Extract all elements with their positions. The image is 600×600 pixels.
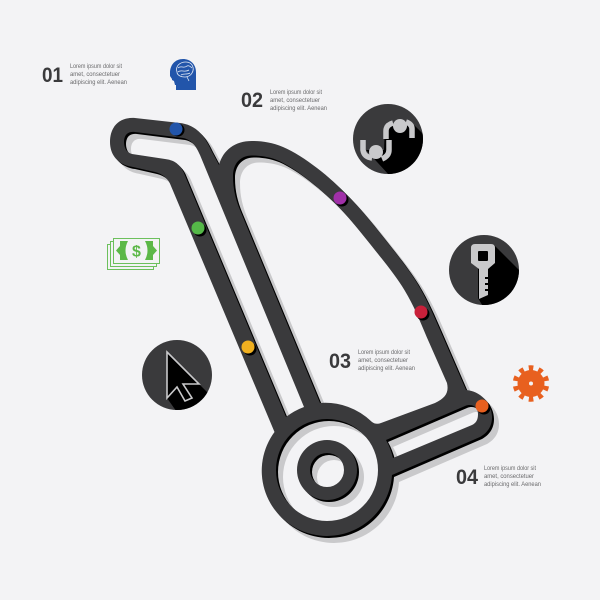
marker: green dot [192, 222, 206, 236]
icon: money banknotes: $ [132, 244, 141, 260]
step 02: adipiscing elit. Aenean [270, 106, 327, 112]
step 01 [42, 64, 127, 87]
step 01: amet, consectetuer [70, 72, 120, 78]
step 04 [456, 466, 541, 489]
marker: blue dot [170, 122, 184, 136]
icon: connected figures in dark circle [353, 104, 423, 174]
icon: head with brain [170, 59, 196, 90]
step 03: amet, consectetuer [358, 358, 408, 364]
marker: yellow dot [242, 340, 256, 356]
step 04: Lorem ipsum dolor sit [484, 466, 536, 472]
icon: money banknotes [108, 238, 160, 270]
icon: cursor in dark circle [142, 340, 212, 410]
marker: purple dot [334, 192, 348, 206]
step 01: Lorem ipsum dolor sit [70, 64, 122, 70]
infographic canvas [42, 59, 549, 543]
step 04: 04 [456, 466, 478, 489]
icon: orange gear [516, 368, 546, 399]
step 03: 03 [329, 350, 351, 373]
step 04: amet, consectetuer [484, 474, 534, 480]
step 01: adipiscing elit. Aenean [70, 80, 127, 86]
step 02: amet, consectetuer [270, 98, 320, 104]
step 03 [329, 350, 415, 373]
step 02: 02 [241, 89, 263, 112]
step 03: Lorem ipsum dolor sit [358, 350, 410, 356]
step 02: Lorem ipsum dolor sit [270, 90, 322, 96]
marker: red dot [414, 306, 430, 320]
step 04: adipiscing elit. Aenean [484, 482, 541, 488]
step 03: adipiscing elit. Aenean [358, 366, 415, 372]
step 02 [241, 89, 327, 112]
icon: key in dark circle [449, 235, 519, 305]
hand truck line illustration [110, 118, 499, 543]
step 01: 01 [42, 64, 63, 87]
marker: orange dot [476, 400, 490, 414]
